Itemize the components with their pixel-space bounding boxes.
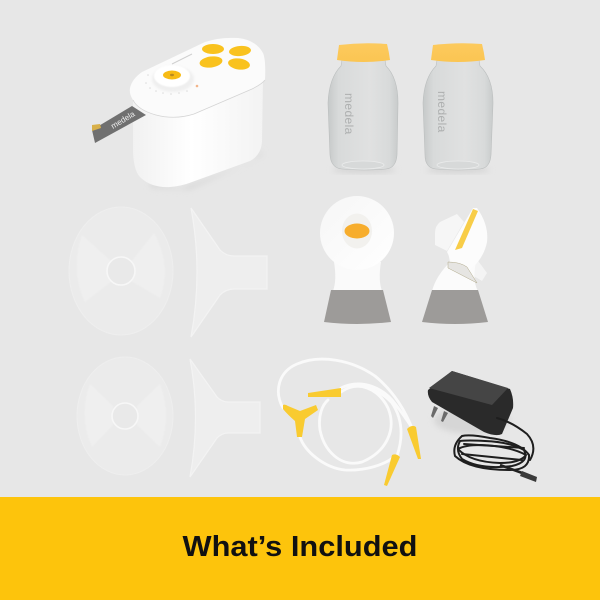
tubing bbox=[278, 359, 421, 486]
adapter shadow bbox=[434, 406, 510, 434]
Y connector bbox=[283, 405, 318, 437]
yellow stripe bbox=[455, 209, 478, 250]
pump motor unit bbox=[92, 38, 265, 190]
shield round bbox=[320, 196, 394, 270]
bottle right bbox=[423, 43, 493, 173]
bottle shadow bbox=[426, 167, 490, 173]
bottle left bbox=[328, 43, 398, 173]
power adapter bbox=[428, 371, 537, 482]
power cord bbox=[454, 418, 533, 470]
grey base bbox=[324, 290, 391, 324]
pump shadow bbox=[150, 150, 262, 190]
shield neck bbox=[333, 262, 382, 291]
carry strap bbox=[92, 106, 146, 143]
tube tip bottom bbox=[384, 454, 400, 486]
funnel shape bbox=[190, 359, 260, 477]
centre ring bbox=[112, 403, 138, 429]
control buttons bbox=[199, 44, 251, 71]
orange valve bbox=[344, 224, 370, 238]
bottle cap bbox=[431, 43, 485, 62]
barrel plug bbox=[520, 471, 537, 482]
small shield bbox=[77, 357, 173, 475]
side clip bbox=[448, 262, 477, 283]
suction dome bbox=[152, 66, 194, 92]
grey base bbox=[422, 290, 488, 324]
breast shield front view bbox=[320, 196, 394, 324]
bottle glass bbox=[328, 60, 398, 170]
funnel shape bbox=[191, 208, 267, 337]
side cup bbox=[435, 214, 464, 251]
strap label: medela bbox=[109, 109, 137, 131]
shield opening bbox=[342, 214, 372, 248]
banner heading: What’s Included bbox=[182, 531, 418, 563]
disc facets bbox=[84, 384, 166, 447]
side tab bbox=[472, 258, 487, 281]
adapter case bbox=[428, 371, 513, 435]
lid marking bbox=[172, 54, 192, 64]
banner bbox=[0, 497, 600, 600]
side dome bbox=[447, 208, 487, 270]
indicator dots bbox=[145, 74, 188, 95]
pump lid bbox=[130, 38, 265, 117]
centre ring bbox=[107, 257, 135, 285]
pump body bbox=[133, 80, 263, 187]
bottle brand: medela bbox=[435, 91, 449, 133]
bottle shadow bbox=[332, 167, 396, 173]
side neck bbox=[432, 252, 478, 291]
outer disc bbox=[77, 357, 173, 475]
large shield bbox=[69, 207, 173, 335]
tube tip straight bbox=[308, 388, 341, 397]
bottle glass bbox=[423, 60, 493, 170]
tube tip right bbox=[407, 426, 421, 459]
disc facets bbox=[77, 233, 165, 302]
breast shield side view bbox=[422, 208, 488, 324]
outer disc bbox=[69, 207, 173, 335]
status light bbox=[196, 85, 198, 87]
adapter top face bbox=[429, 371, 508, 405]
bottle brand: medela bbox=[342, 93, 356, 135]
tube loops bbox=[278, 359, 412, 470]
bottle cap bbox=[337, 43, 390, 62]
plug prongs bbox=[431, 406, 448, 422]
